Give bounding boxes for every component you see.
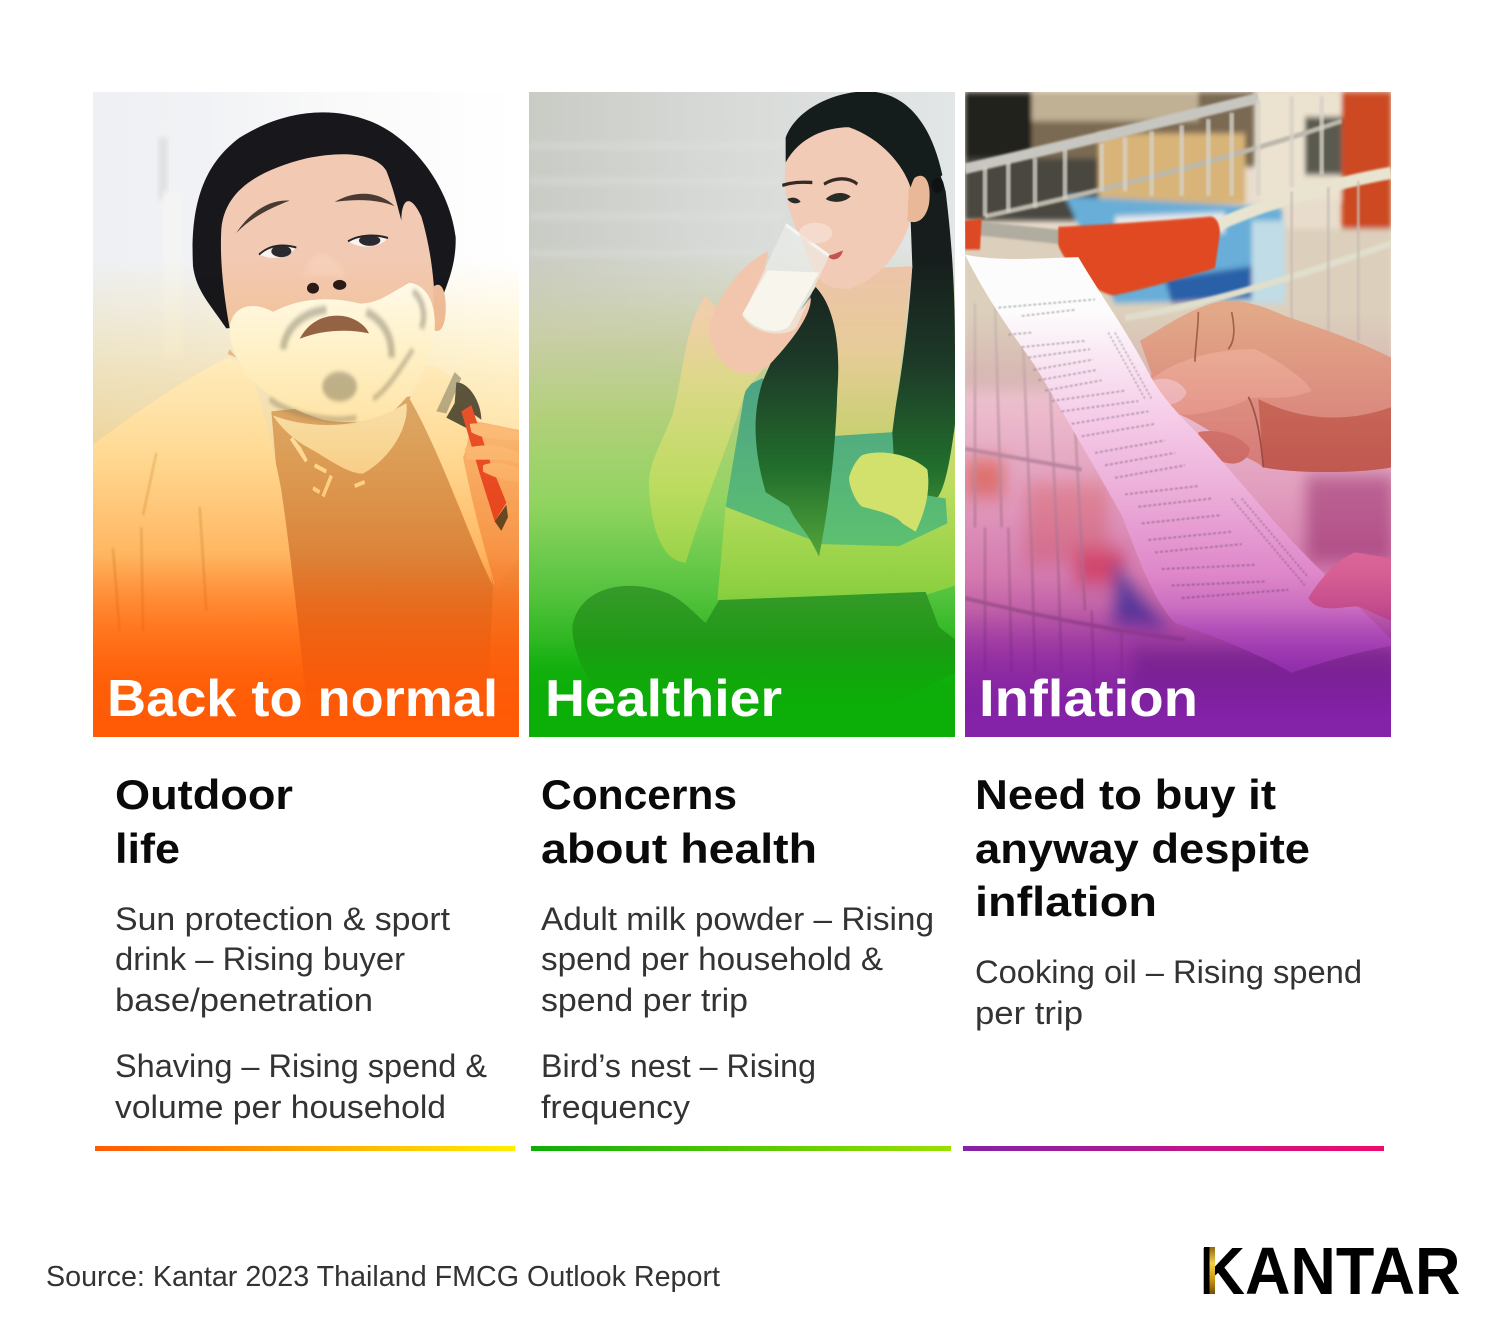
- gradient rule: orange to yellow: [95, 1146, 515, 1151]
- gradient overlay: purple multiply: [965, 329, 1391, 713]
- panel: Healthier: [529, 91, 955, 737]
- photo: hand holding receipt over shopping cart: [965, 92, 1391, 701]
- column 1 text: [115, 771, 487, 1125]
- heading: Need to buy it anyway despite inflation: Need to buy it: [975, 771, 1276, 818]
- text block: adult milk powder: [541, 901, 934, 1018]
- heading: Outdoor life: life: [115, 825, 180, 872]
- text block: shaving: volume per household: [115, 1089, 446, 1125]
- text block: cooking oil: per trip: [975, 995, 1083, 1031]
- text block: adult milk powder: Adult milk powder – Rising: [541, 901, 934, 937]
- panel title: Back to normal: [107, 670, 498, 728]
- heading: Concerns about health: [541, 771, 817, 872]
- heading: Need to buy it anyway despite inflation: anyway despite: [975, 825, 1310, 872]
- panel title: Healthier: [545, 670, 782, 728]
- heading: Need to buy it anyway despite inflation: inflation: [975, 878, 1157, 925]
- gradient rule: green: [531, 1146, 951, 1151]
- heading: Need to buy it anyway despite inflation: [975, 771, 1310, 925]
- text block: bird's nest: frequency: [541, 1089, 690, 1125]
- heading: Concerns about health: about health: [541, 825, 817, 872]
- text block: adult milk powder: spend per household &: [541, 941, 883, 977]
- text block: cooking oil: Cooking oil – Rising spend: [975, 954, 1362, 990]
- source note: Source: Kantar 2023 Thailand FMCG Outlook Report: [46, 1261, 720, 1293]
- heading: Outdoor life: [115, 771, 293, 872]
- text block: sun protection: drink – Rising buyer: [115, 941, 405, 977]
- gradient rule: purple to pink: [963, 1146, 1384, 1151]
- gradient overlay: orange solid: [93, 572, 519, 737]
- gradient overlay: purple solid: [965, 622, 1391, 737]
- text block: adult milk powder: spend per trip: [541, 982, 748, 1018]
- text block: sun protection: Sun protection & sport: [115, 901, 450, 937]
- gradient overlay: green solid: [529, 92, 955, 737]
- text block: bird's nest: Bird’s nest – Rising: [541, 1048, 816, 1084]
- panel: Back to normal: [93, 92, 519, 737]
- text block: bird's nest: [541, 1048, 816, 1125]
- text block: sun protection: [115, 901, 450, 1018]
- gradient overlay: orange multiply: [93, 276, 519, 715]
- heading: Outdoor life: Outdoor: [115, 771, 293, 818]
- column 3 text: [975, 771, 1362, 1031]
- text block: cooking oil: [975, 954, 1362, 1031]
- photo: man shaving: [93, 92, 519, 668]
- photo: woman drinking milk: [529, 91, 955, 737]
- panel title: Inflation: [979, 670, 1198, 728]
- text block: sun protection: base/penetration: [115, 982, 373, 1018]
- panel: Inflation: [952, 92, 1405, 764]
- text block: shaving: [115, 1048, 487, 1125]
- column 2 text: [541, 771, 934, 1125]
- logo: Kantar: KANTAR: [1200, 1234, 1460, 1309]
- text block: shaving: Shaving – Rising spend &: [115, 1048, 487, 1084]
- heading: Concerns about health: Concerns: [541, 771, 737, 818]
